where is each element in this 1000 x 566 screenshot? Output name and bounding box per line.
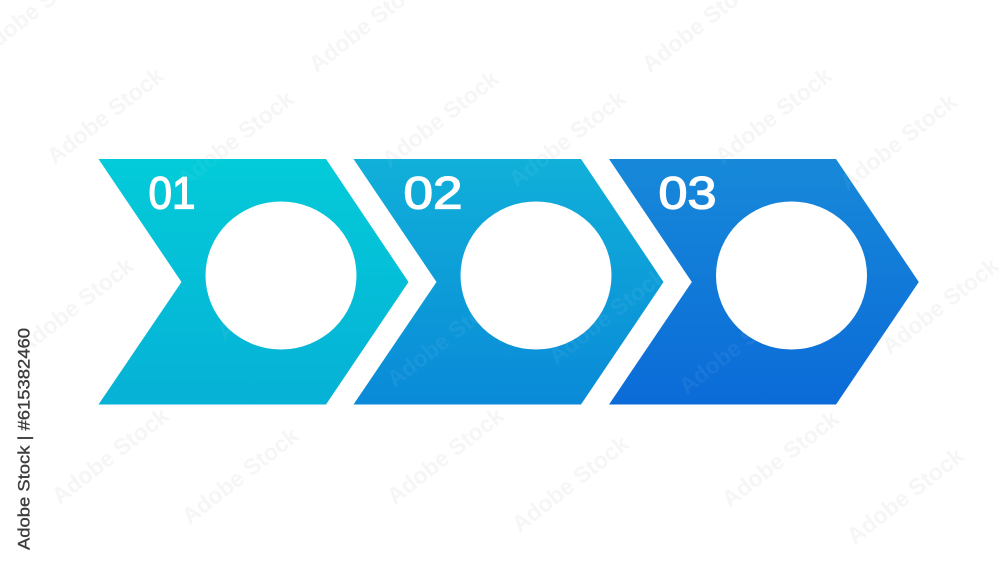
number 02: 02 xyxy=(404,168,462,218)
watermark on background: Adobe Stock xyxy=(12,252,139,359)
watermark on background: Adobe Stock xyxy=(877,252,1000,359)
circle placeholder 3 xyxy=(716,202,867,350)
watermark over chevrons: Adobe Stock xyxy=(710,62,837,169)
watermark on background: Adobe Stock xyxy=(710,62,837,169)
watermark on background: Adobe Stock xyxy=(835,88,962,195)
watermark on background: Adobe Stock xyxy=(507,430,634,537)
watermark over chevrons: Adobe Stock xyxy=(835,88,962,195)
chevron shape 3 xyxy=(609,159,919,404)
watermark on background: Adobe Stock xyxy=(504,85,631,192)
watermark on background: Adobe Stock xyxy=(42,62,169,169)
chevron shape 2 xyxy=(354,159,664,404)
watermark on background: Adobe Stock xyxy=(382,402,509,509)
step 1 chevron xyxy=(98,159,408,404)
watermark over chevrons xyxy=(172,62,962,399)
watermark over chevrons: Adobe Stock xyxy=(674,292,801,399)
side credit text: Adobe Stock | #615382460 xyxy=(14,328,34,550)
watermark on background: Adobe Stock xyxy=(842,442,969,549)
circle placeholder 1 xyxy=(206,202,356,350)
watermark on background: Adobe Stock xyxy=(377,65,504,172)
watermark over chevrons: Adobe Stock xyxy=(382,285,509,392)
watermark over chevrons: Adobe Stock xyxy=(377,65,504,172)
chevron shape 1 xyxy=(98,159,408,404)
step 2 chevron xyxy=(354,159,664,404)
watermark over chevrons: Adobe Stock xyxy=(212,238,339,345)
watermark on background: Adobe Stock xyxy=(177,422,304,529)
number 01: 01 xyxy=(148,168,196,218)
watermark on background: Adobe Stock xyxy=(47,402,174,509)
watermark over chevrons: Adobe Stock xyxy=(504,85,631,192)
circle placeholder 2 xyxy=(460,202,612,350)
watermark over chevrons: Adobe Stock xyxy=(544,262,671,369)
watermark on background: Adobe Stock xyxy=(172,85,299,192)
watermark on background: Adobe Stock xyxy=(717,405,844,512)
number 03: 03 xyxy=(658,168,716,218)
watermark over chevrons: Adobe Stock xyxy=(172,85,299,192)
step 3 chevron xyxy=(609,159,919,404)
